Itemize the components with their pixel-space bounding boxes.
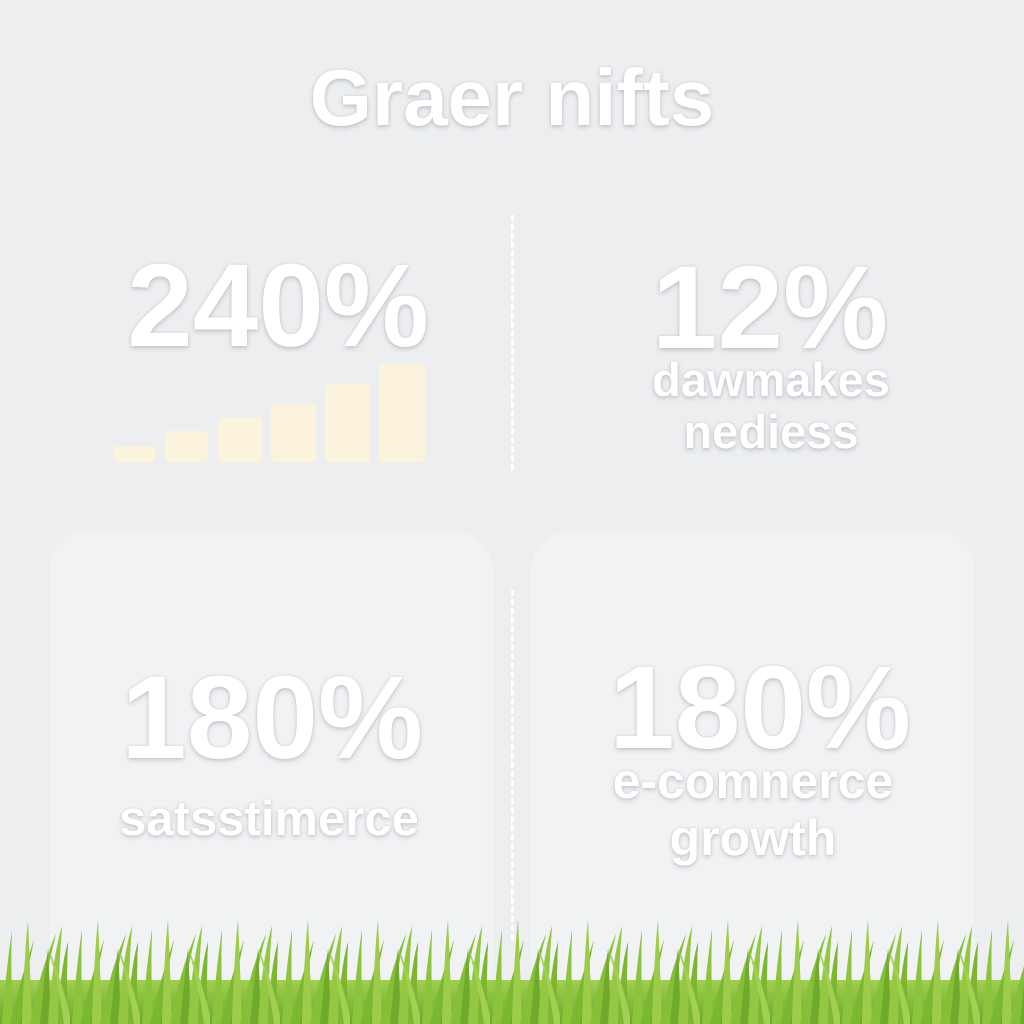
panel: bottom left	[50, 530, 493, 1010]
stat: 12%: 12%	[652, 242, 888, 374]
label: e-comnerce growth	[612, 753, 894, 870]
label: dawmakes nediess: dawmakes	[652, 353, 890, 406]
panel: bottom right	[531, 530, 974, 1010]
stat: 180% left: 180%	[121, 652, 423, 784]
label: e-comnerce growth: growth	[670, 810, 836, 866]
title: Graer nifts	[310, 53, 714, 142]
label: satsstimerce: satsstimerce	[119, 792, 419, 846]
label: dawmakes nediess: nediess	[683, 405, 859, 458]
label: e-comnerce growth: e-comnerce	[613, 753, 893, 809]
label: dawmakes nediess	[652, 353, 890, 458]
stat: 240%: 240%	[127, 240, 429, 372]
grass	[0, 920, 1024, 1024]
bar chart	[113, 363, 425, 462]
stat: 180% right: 180%	[609, 642, 911, 774]
